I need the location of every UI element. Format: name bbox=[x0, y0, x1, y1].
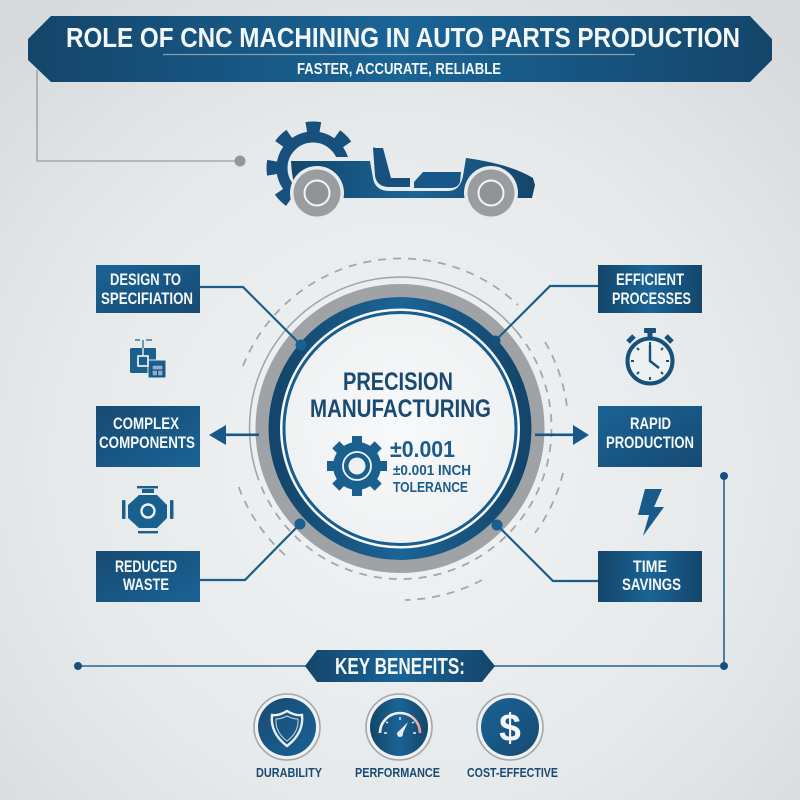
tolerance value: ±0.001 INCH bbox=[393, 462, 471, 479]
connector: benefits rail bbox=[74, 472, 728, 670]
box: rapid production: RAPID bbox=[630, 414, 671, 433]
box: reduced waste: WASTE bbox=[123, 575, 169, 594]
box: design to specification: SPECIFIATION bbox=[101, 289, 193, 308]
tolerance value bbox=[390, 436, 471, 496]
connector: design to specification bbox=[200, 287, 306, 350]
icon: center gear bbox=[327, 436, 387, 496]
central precision dial bbox=[250, 277, 538, 566]
arrow: to rapid production bbox=[535, 425, 589, 445]
heading: precision manufacturing: PRECISION bbox=[343, 368, 453, 396]
heading: precision manufacturing bbox=[310, 368, 491, 423]
box: complex components: COMPLEX bbox=[113, 414, 180, 433]
benefit: durability: DURABILITY bbox=[256, 765, 322, 780]
icon: shield bbox=[254, 694, 320, 760]
benefit: durability bbox=[254, 694, 322, 780]
benefit: performance: PERFORMANCE bbox=[355, 765, 440, 780]
key benefits heading bbox=[305, 650, 495, 682]
title banner bbox=[28, 16, 772, 82]
box: rapid production: PRODUCTION bbox=[606, 433, 694, 452]
benefit: cost-effective bbox=[467, 694, 558, 780]
box: efficient processes: EFFICIENT bbox=[616, 270, 684, 289]
icon: speedometer bbox=[366, 694, 432, 760]
tolerance value: ±0.001 bbox=[390, 436, 455, 462]
connector: banner to car bbox=[37, 70, 246, 166]
box: complex components: COMPONENTS bbox=[99, 433, 195, 452]
box: time savings: SAVINGS bbox=[622, 575, 681, 594]
benefit: performance bbox=[355, 694, 440, 780]
benefit: cost-effective: COST-EFFECTIVE bbox=[467, 765, 558, 780]
box: design to specification: DESIGN TO bbox=[110, 270, 181, 289]
icon: dollar: $ bbox=[499, 707, 521, 750]
connector: efficient processes bbox=[490, 286, 598, 346]
box: rapid production bbox=[598, 406, 702, 467]
box: reduced waste bbox=[96, 551, 200, 602]
icon: car with gear bbox=[272, 127, 535, 220]
icon: design blueprint bbox=[130, 340, 166, 378]
box: time savings: TIME bbox=[633, 557, 667, 576]
box: efficient processes: PROCESSES bbox=[612, 289, 691, 308]
box: time savings bbox=[598, 551, 702, 602]
box: design to specification bbox=[96, 265, 200, 313]
subtitle: FASTER, ACCURATE, RELIABLE bbox=[297, 61, 501, 78]
arrow: to complex components bbox=[209, 425, 259, 445]
tolerance value: TOLERANCE bbox=[393, 479, 468, 496]
icon: lightning bolt bbox=[638, 489, 664, 536]
box: reduced waste: REDUCED bbox=[115, 557, 177, 576]
heading: precision manufacturing: MANUFACTURING bbox=[310, 395, 491, 423]
box: efficient processes bbox=[598, 265, 702, 313]
connector: time savings bbox=[492, 520, 598, 581]
connector: reduced waste bbox=[200, 518, 306, 580]
box: complex components bbox=[96, 406, 200, 467]
icon: stopwatch bbox=[628, 328, 672, 384]
dashed orbit rings bbox=[238, 258, 567, 600]
key benefits heading: KEY BENEFITS: bbox=[335, 653, 465, 679]
icon: engine bbox=[122, 486, 174, 533]
